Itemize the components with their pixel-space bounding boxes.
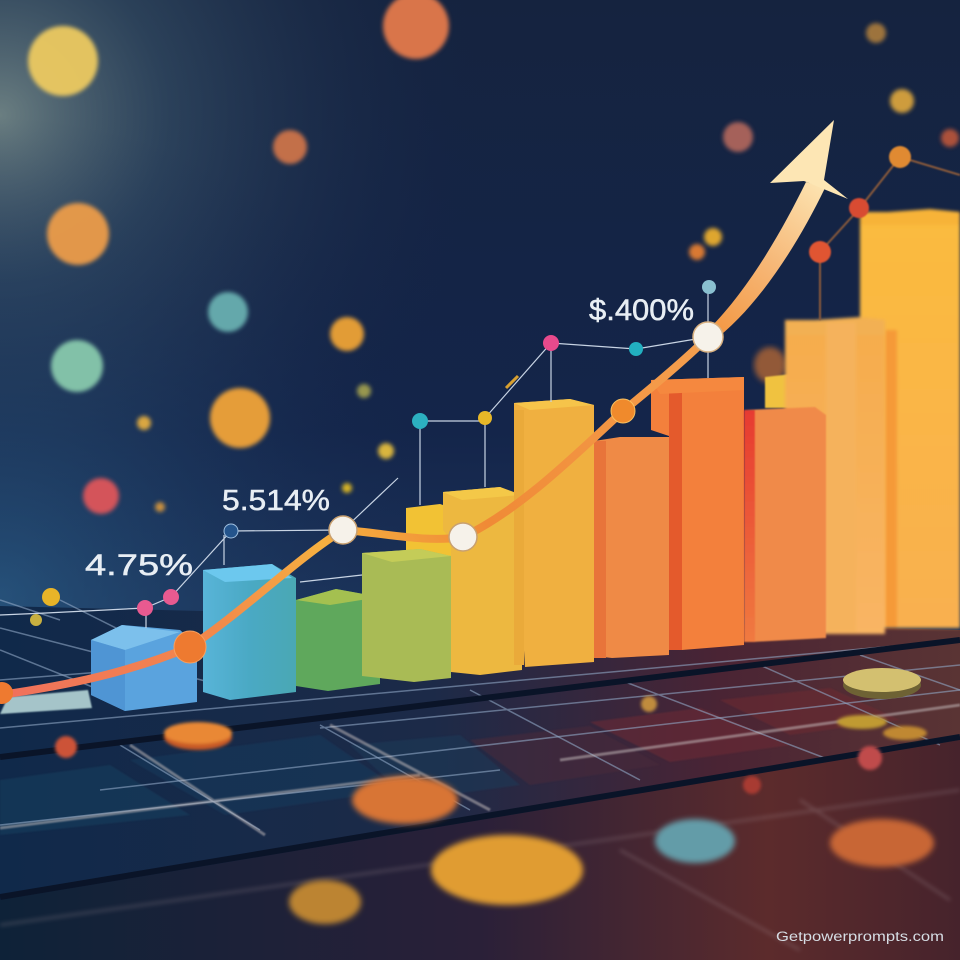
glow behind bars (754, 347, 786, 383)
floor tile patches (0, 688, 900, 835)
bar 6 amber (514, 399, 594, 667)
bokeh circles (28, 0, 959, 514)
small yellow box behind bar 9 (765, 373, 800, 408)
bar 7 orange (594, 437, 669, 658)
thin connector lines and nodes (0, 157, 960, 628)
chart nodes (30, 146, 911, 626)
bar 3 green (296, 589, 380, 691)
watermark: Getpowerprompts.com (776, 929, 944, 944)
label: 5.514%: 5.514% (222, 485, 330, 517)
floor discs (55, 668, 934, 924)
growth line with arrow (0, 120, 848, 704)
bar 4 yellow green (362, 549, 451, 682)
bar 8 red orange (651, 377, 744, 650)
small yellow behind bar 4 (406, 504, 464, 560)
floor grid (0, 600, 960, 960)
light reflection patch (0, 690, 92, 714)
bar 11 tall (860, 209, 960, 628)
bars (91, 209, 960, 711)
bar 9 (744, 407, 826, 642)
bar 2 teal (203, 564, 296, 700)
bar 5 yellow (443, 487, 522, 675)
bar 10 (785, 317, 885, 634)
arrow head (770, 120, 848, 199)
arrow shaft (704, 182, 825, 342)
label: $.400%: $.400% (589, 294, 694, 327)
line markers (174, 631, 206, 663)
bar 1 blue (91, 625, 197, 711)
label: 4.75%: 4.75% (85, 549, 193, 582)
